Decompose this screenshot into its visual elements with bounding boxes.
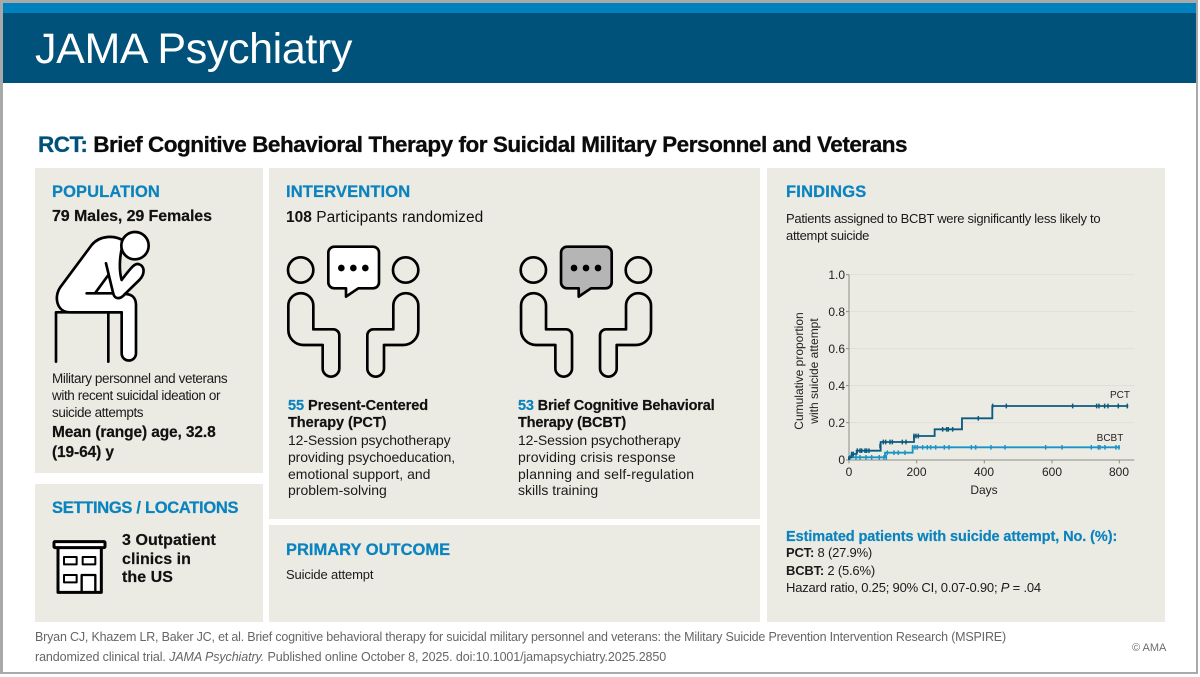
estimated heading: Estimated patients with suicide attempt, No. (%): xyxy=(786,529,1117,545)
y axis tick labels: 0.6 xyxy=(828,342,845,356)
series label BCBT: BCBT xyxy=(1097,433,1123,444)
y axis title: Cumulative proportion xyxy=(792,312,806,430)
icon: building xyxy=(54,542,105,592)
panel: settings xyxy=(35,484,263,622)
panel: primary outcome xyxy=(269,525,760,622)
citation: randomized clinical trial. JAMA Psychiatry. Published online October 8, 2025. doi:10.1001/jamapsychiatry.2025.2850 xyxy=(35,650,666,664)
BCBT curve xyxy=(849,445,1120,460)
citation xyxy=(35,630,1006,664)
header banner xyxy=(3,3,1196,83)
chart: cumulative proportion with suicide attempt: with suicide attempt xyxy=(807,318,821,425)
age: (19-64) y xyxy=(52,444,114,461)
population counts: 79 Males, 29 Females xyxy=(52,208,212,225)
population heading: POPULATION xyxy=(52,183,160,201)
PCT curve xyxy=(849,404,1128,460)
BCBT arm text xyxy=(518,398,715,498)
BCBT arm text: Therapy (BCBT) xyxy=(518,415,626,431)
x axis tick labels: 200 xyxy=(906,465,927,479)
population description: suicide attempts xyxy=(52,405,143,420)
header accent stripe xyxy=(3,3,1196,13)
PCT arm text: 55 Present-Centered xyxy=(288,398,428,414)
BCBT arm text: providing crisis response xyxy=(518,449,676,465)
PCT arm text: problem-solving xyxy=(288,482,387,498)
x axis title: Days xyxy=(970,483,998,497)
x axis tick labels: 800 xyxy=(1109,465,1129,479)
population description: with recent suicidal ideation or xyxy=(52,388,220,403)
BCBT arm text: planning and self-regulation xyxy=(518,466,694,482)
PCT arm text: emotional support, and xyxy=(288,466,430,482)
y axis tick labels: 0 xyxy=(838,453,845,467)
PCT arm text: 12-Session psychotherapy xyxy=(288,432,451,448)
x axis tick labels: 600 xyxy=(1042,465,1062,479)
settings text: the US xyxy=(122,569,173,586)
findings summary: attempt suicide xyxy=(786,228,869,243)
settings text xyxy=(122,532,216,586)
icon: two people talking, PCT xyxy=(288,247,418,377)
BCBT arm text: 53 Brief Cognitive Behavioral xyxy=(518,398,715,414)
PCT arm text xyxy=(288,398,455,498)
title: RCT: Brief Cognitive Behavioral Therapy for Suicidal Military Personnel and Veterans xyxy=(38,132,907,157)
panel: intervention xyxy=(269,168,760,519)
PCT arm text: providing psychoeducation, xyxy=(288,449,455,465)
panel: population xyxy=(35,168,263,473)
age xyxy=(52,424,216,461)
BCBT arm text: 12-Session psychotherapy xyxy=(518,432,681,448)
panel: findings xyxy=(767,168,1165,622)
x axis tick labels: 400 xyxy=(974,465,994,479)
primary outcome text: Suicide attempt xyxy=(286,567,373,582)
estimated results xyxy=(786,545,1041,595)
journal name: JAMA Psychiatry xyxy=(35,25,352,73)
y axis tick labels: 0.2 xyxy=(828,416,845,430)
chart: cumulative proportion with suicide attempt xyxy=(792,268,1134,497)
series label PCT: PCT xyxy=(1110,390,1130,401)
settings text: clinics in xyxy=(122,550,191,568)
y axis tick labels: 1.0 xyxy=(828,268,845,282)
findings heading: FINDINGS xyxy=(786,183,866,201)
y axis tick labels xyxy=(828,268,845,467)
icon: seated person xyxy=(56,232,149,362)
settings text: 3 Outpatient xyxy=(122,532,216,549)
PCT arm text: Therapy (PCT) xyxy=(288,415,386,431)
primary outcome heading: PRIMARY OUTCOME xyxy=(286,541,450,559)
y axis tick labels: 0.4 xyxy=(828,379,845,393)
x axis tick labels xyxy=(846,465,1129,479)
citation: Bryan CJ, Khazem LR, Baker JC, et al. Brief cognitive behavioral therapy for suicidal military personnel and veterans: the Military Suicide Prevention Intervention Research (MSPIRE) xyxy=(35,630,1006,644)
x axis tick labels: 0 xyxy=(846,465,853,479)
estimated results: BCBT: 2 (5.6%) xyxy=(786,562,875,578)
findings summary: Patients assigned to BCBT were significantly less likely to xyxy=(786,211,1100,226)
copyright: © AMA xyxy=(1132,642,1166,654)
findings summary xyxy=(786,211,1100,243)
BCBT arm text: skills training xyxy=(518,482,598,498)
intervention heading: INTERVENTION xyxy=(286,183,410,201)
estimated results: Hazard ratio, 0.25; 90% CI, 0.07-0.90; P = .04 xyxy=(786,580,1041,595)
settings heading: SETTINGS / LOCATIONS xyxy=(52,499,238,517)
age: Mean (range) age, 32.8 xyxy=(52,424,216,441)
population description xyxy=(52,371,228,420)
icon: two people talking, BCBT xyxy=(521,247,651,377)
y axis tick labels: 0.8 xyxy=(828,305,845,319)
population description: Military personnel and veterans xyxy=(52,371,227,386)
participants: 108 Participants randomized xyxy=(286,209,483,226)
estimated results: PCT: 8 (27.9%) xyxy=(786,545,872,560)
